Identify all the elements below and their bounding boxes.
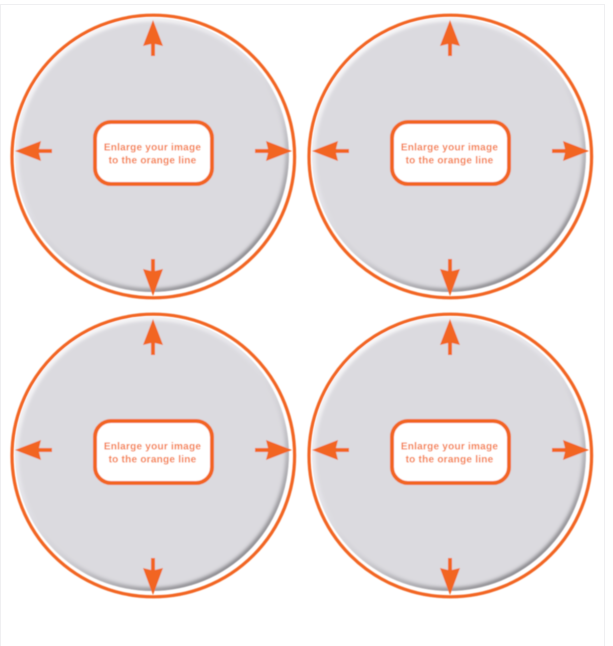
grey disc [15, 317, 289, 591]
arrow: up [143, 20, 163, 56]
orange outer ring [309, 314, 592, 597]
grey disc [15, 18, 289, 292]
label box: to the orange line [406, 156, 494, 166]
orange outer ring [12, 15, 295, 298]
label box: to the orange line [109, 156, 197, 166]
panel: top-right circle template [309, 15, 592, 298]
arrow: left [312, 141, 349, 161]
panel: bottom-right circle template [309, 314, 592, 597]
arrow: right [552, 141, 589, 161]
arrow: left [15, 141, 52, 161]
label box [95, 122, 212, 184]
orange outer ring [12, 314, 295, 597]
arrow: down [440, 259, 460, 296]
orange outer ring [309, 15, 592, 298]
arrow: down [143, 259, 163, 296]
grey disc [312, 18, 586, 292]
arrow: right [255, 141, 292, 161]
arrow: up [440, 319, 460, 355]
panel: bottom-left circle template [12, 314, 295, 597]
panel: top-left circle template [12, 15, 295, 298]
arrow: right [255, 440, 292, 460]
arrow: right [552, 440, 589, 460]
label box [392, 122, 509, 184]
label box: to the orange line [109, 454, 197, 466]
label box [392, 421, 509, 483]
arrow: left [312, 440, 349, 460]
label box: Enlarge your image [401, 142, 498, 154]
label box: Enlarge your image [401, 442, 498, 452]
arrow: left [15, 440, 52, 460]
arrow: down [440, 558, 460, 595]
label box [95, 421, 212, 483]
grey disc [312, 317, 586, 591]
arrow: up [440, 20, 460, 56]
arrow: down [143, 558, 163, 595]
arrow: up [143, 319, 163, 355]
label box: to the orange line [406, 454, 494, 466]
label box: Enlarge your image [104, 442, 201, 452]
label box: Enlarge your image [104, 142, 201, 154]
